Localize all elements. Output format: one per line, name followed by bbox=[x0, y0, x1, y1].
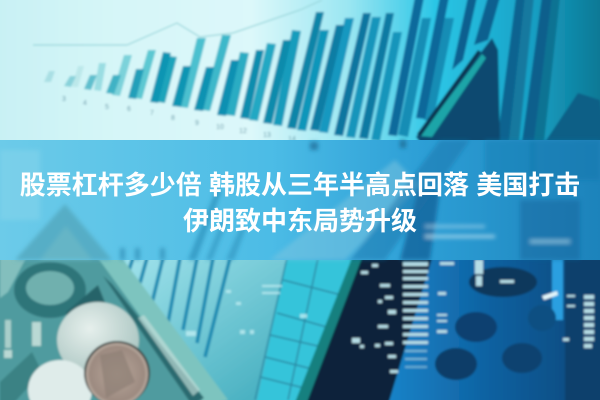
pen tip bbox=[416, 38, 500, 142]
title bbox=[20, 170, 580, 236]
title: 股票杠杆多少倍 韩股从三年半高点回落 美国打击 bbox=[20, 170, 580, 200]
blue ruled chart paper bbox=[100, 258, 305, 400]
axis tick labels: 5 bbox=[105, 104, 109, 111]
distant hill shape bbox=[545, 93, 600, 142]
axis tick labels: 3 bbox=[62, 96, 66, 103]
axis tick labels: 7 bbox=[150, 110, 154, 117]
axis tick labels: 9 bbox=[195, 120, 199, 127]
blue calculator bbox=[388, 258, 600, 400]
title: 伊朗致中东局势升级 bbox=[183, 206, 417, 236]
upper chart panel bbox=[0, 0, 600, 145]
chart trend line bbox=[33, 0, 322, 45]
axis tick labels: 14 bbox=[288, 136, 296, 143]
axis tick labels bbox=[62, 96, 296, 143]
faint contents under band bbox=[0, 140, 600, 260]
coins bbox=[28, 302, 150, 400]
bar chart: back bars bbox=[72, 17, 454, 141]
axis tick labels: 10 bbox=[216, 124, 224, 131]
axis tick labels: 8 bbox=[171, 115, 175, 122]
printed digits column bbox=[352, 260, 594, 373]
translucent title band bbox=[0, 140, 600, 260]
axis tick labels: 6 bbox=[127, 106, 131, 113]
dark pen diagonal bbox=[298, 258, 436, 400]
axis tick labels: 12 bbox=[239, 128, 247, 135]
dollar bill bbox=[0, 258, 228, 400]
keyboard grid bbox=[186, 258, 360, 400]
bar chart: front bars bbox=[44, 0, 560, 142]
lower photo panel bbox=[0, 258, 600, 400]
axis tick labels: 13 bbox=[263, 132, 271, 139]
axis tick labels: 4 bbox=[83, 100, 87, 107]
